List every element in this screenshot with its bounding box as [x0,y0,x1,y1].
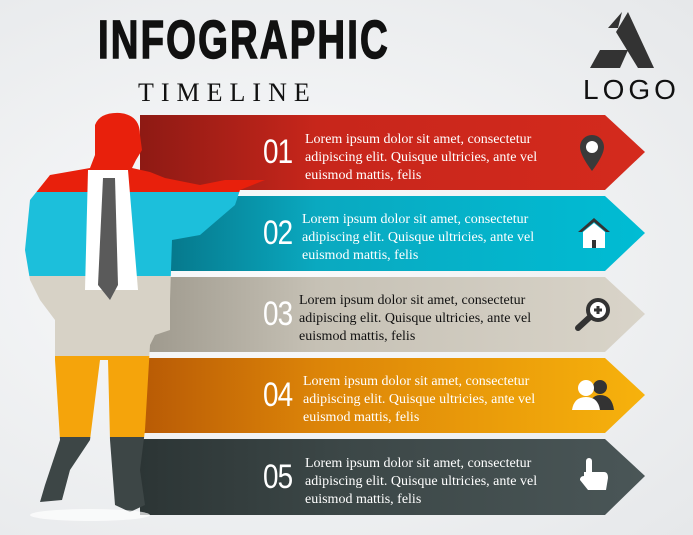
icon: map pin [580,135,604,171]
text: 03 [263,295,292,333]
text: 02 [263,214,292,252]
band 2 [140,196,645,271]
text: Lorem ipsum dolor sit amet, consectetur [305,456,531,471]
band 3 [140,277,645,352]
text: euismod mattis, felis [303,410,419,425]
text: adipiscing elit. Quisque ultricies, ante vel [299,311,531,326]
icon: users [572,380,614,410]
logo: LOGO [583,74,680,105]
text: adipiscing elit. Quisque ultricies, ante vel [305,150,537,165]
row 4 [263,374,614,425]
text: adipiscing elit. Quisque ultricies, ante vel [302,230,534,245]
icon: magnifier [575,298,610,331]
subtitle: TIMELINE [138,78,317,107]
logo [583,12,680,105]
text: adipiscing elit. Quisque ultricies, ante vel [303,392,535,407]
text: Lorem ipsum dolor sit amet, consectetur [302,212,528,227]
text: 04 [263,376,292,414]
row 5 [263,456,608,507]
text: euismod mattis, felis [302,248,418,263]
band 1 [140,115,645,190]
row 1 [263,132,604,183]
row 3 [263,293,610,344]
text: Lorem ipsum dolor sit amet, consectetur [305,132,531,147]
text: 01 [263,133,292,171]
text: euismod mattis, felis [299,329,415,344]
text: adipiscing elit. Quisque ultricies, ante vel [305,474,537,489]
icon: house [578,218,610,248]
text: euismod mattis, felis [305,168,421,183]
text: Lorem ipsum dolor sit amet, consectetur [303,374,529,389]
timeline bands [25,112,645,521]
text: 05 [263,458,292,496]
text: euismod mattis, felis [305,492,421,507]
title: INFOGRAPHIC [98,10,390,70]
figure silhouette [25,112,265,512]
text: Lorem ipsum dolor sit amet, consectetur [299,293,525,308]
band 4 [140,358,645,433]
icon: pointing hand [580,458,608,490]
row 2 [263,212,610,263]
band 5 [140,439,645,515]
